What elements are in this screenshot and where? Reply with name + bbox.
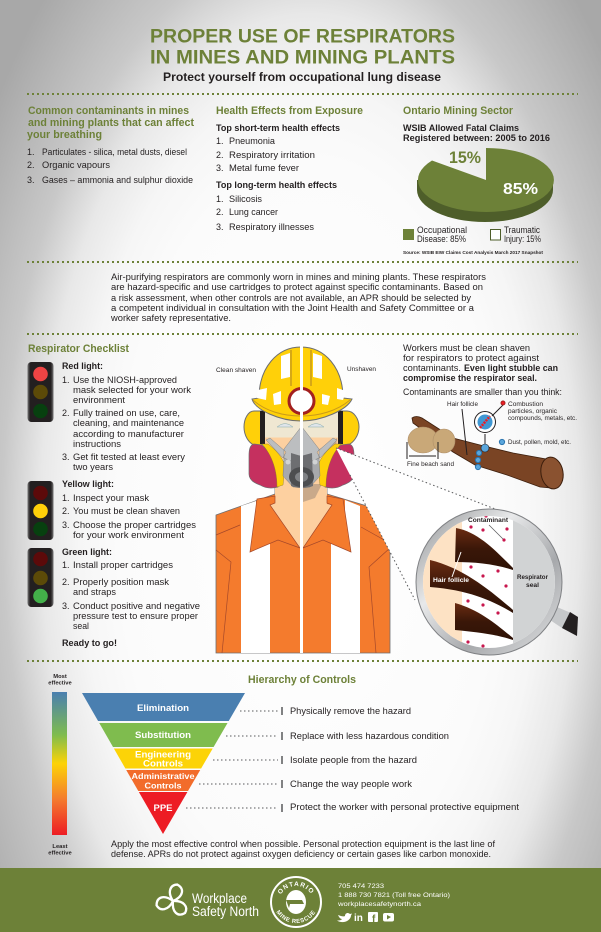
pie legend: Disease: 85% [417, 234, 466, 244]
logo: Workplace Safety North: Safety North [192, 904, 259, 919]
red light steps: Get fit tested at least every [73, 452, 186, 462]
long-term effects list: 2. [216, 207, 224, 217]
particle labels: Hair follicle [447, 401, 479, 408]
panel: health effects [216, 105, 363, 232]
long-term effects list: Silicosis [229, 194, 262, 204]
lens labels: seal [526, 582, 539, 589]
contaminants list: Gases – ammonia and sulphur dioxide [42, 175, 193, 185]
long-term effects list: 1. [216, 194, 224, 204]
yellow light steps: for your work environment [73, 530, 185, 540]
pie chart: 85% [503, 181, 538, 198]
particle magnifier [462, 405, 503, 455]
ear muffs [244, 411, 359, 446]
source note: Source: WSIB EIW Claims Cost Analysis March 2017 Snapshot [403, 250, 543, 256]
panel: common contaminants [27, 105, 194, 185]
lens contents [423, 516, 555, 648]
pie chart: 15% [449, 148, 481, 167]
red light steps: environment [73, 395, 126, 405]
yellow light steps: 2. [62, 506, 70, 516]
red light steps: according to manufacturer [73, 429, 184, 439]
contact details: 1 888 730 7821 (Toll free Ontario) [338, 892, 450, 899]
intro paragraph: Air-purifying respirators are commonly worn in mines and mining plants. These respirators [111, 272, 487, 282]
panel: respirator checklist [28, 343, 200, 648]
worker body and vest [216, 478, 390, 653]
yellow light steps: 1. [62, 493, 70, 503]
illustration: worker with respirator [216, 346, 503, 653]
yellow light steps: Choose the proper cartridges [73, 520, 197, 530]
diagram: particle size on a hair [407, 401, 577, 491]
pie legend: Traumatic [504, 225, 540, 235]
text: clean shaven note: Workers must be clean shaven [403, 343, 530, 353]
control descriptions [290, 706, 520, 812]
long-term effects list: Respiratory illnesses [229, 222, 315, 232]
green light steps: Install proper cartridges [73, 560, 174, 570]
text: clean shaven note: Contaminants are smaller than you think: [403, 387, 562, 397]
contaminants list: 2. [27, 160, 35, 170]
title: PROPER USE OF RESPIRATORS [150, 26, 455, 48]
text: clean shaven note: Even light stubble can [464, 363, 558, 373]
intro paragraph: a risk assessment, when other controls are not available, an APR should be selected by [111, 293, 472, 303]
particle labels [407, 401, 577, 468]
contact details: 705 474 7233 [338, 883, 384, 890]
green light steps: Properly position mask [73, 577, 170, 587]
logo: Ontario Mine Rescue: ONTARIO [278, 882, 314, 894]
intro paragraph: are hazard-specific and use cartridges to protect against specific contaminants. Based on [111, 282, 483, 292]
traffic light: yellow [28, 481, 54, 540]
title: IN MINES AND MINING PLANTS [150, 48, 455, 68]
green light steps [62, 547, 200, 648]
headlamp [289, 388, 314, 414]
inverted pyramid [80, 693, 250, 834]
effectiveness scale: Least [52, 844, 68, 850]
logo: Workplace Safety North: Workplace [192, 891, 247, 906]
short-term effects list: 3. [216, 163, 224, 173]
label: unshaven: Unshaven [347, 366, 376, 373]
effectiveness scale: Most [53, 674, 67, 680]
logo: Ontario Mine Rescue [270, 876, 322, 928]
inverted pyramid: Controls [144, 780, 182, 790]
heading: Ontario: Ontario Mining Sector [403, 105, 514, 117]
long-term effects list: 3. [216, 222, 224, 232]
lens labels: Contaminant [468, 517, 508, 524]
social icons [337, 912, 394, 925]
beach sand grains [408, 427, 455, 453]
short-term effects list: Metal fume fever [229, 163, 299, 173]
inverted pyramid: Engineering [135, 750, 191, 760]
green light steps: seal [73, 621, 89, 631]
intro paragraph [110, 272, 487, 323]
particle labels: Dust, pollen, mold, etc. [508, 439, 571, 446]
social icons: in [354, 913, 363, 924]
lens labels: Hair follicle [433, 577, 470, 584]
effectiveness scale [48, 674, 73, 856]
particle labels: Combustion [508, 401, 544, 408]
control descriptions: Replace with less hazardous condition [290, 731, 449, 741]
label: clean shaven: Clean shaven [216, 367, 256, 374]
head straps and nose piece [266, 427, 337, 461]
text: clean shaven note: compromise the respirator seal. [403, 373, 537, 383]
red light steps [62, 361, 192, 472]
closing note: defense. APRs do not protect against oxygen deficiency or certain gases like carbon monoxide. [111, 849, 491, 859]
red light steps: Fully trained on use, care, [73, 408, 180, 418]
dust particles [475, 450, 482, 470]
control descriptions: Isolate people from the hazard [290, 755, 417, 765]
silver mask sides [283, 456, 320, 487]
logo: Ontario Mine Rescue: MINE RESCUE [276, 910, 316, 924]
particle labels: Fine beach sand [407, 461, 455, 468]
heading: hierarchy: Hierarchy of Controls [248, 674, 356, 686]
yellow light steps: 3. [62, 520, 70, 530]
long-term effects list [216, 180, 337, 232]
short-term effects list: Pneumonia [229, 136, 275, 146]
pie subtitle [403, 123, 550, 143]
contact details: workplacesafetynorth.ca [337, 901, 421, 908]
green light steps: Conduct positive and negative [73, 601, 200, 611]
effectiveness scale: effective [48, 850, 73, 856]
closing note: Apply the most effective control when possible. Personal protection equipment is the last line of [111, 839, 496, 849]
pie subtitle: WSIB Allowed Fatal Claims [403, 123, 519, 133]
footer band [0, 868, 601, 932]
pie subtitle: Registered between: 2005 to 2016 [403, 133, 550, 143]
pyramid leader lines [186, 707, 282, 812]
long-term effects list: Lung cancer [229, 207, 278, 217]
contaminants list: 1. [27, 147, 35, 157]
red light steps: Red light: [62, 361, 103, 371]
yellow light steps: You must be clean shaven [73, 506, 180, 516]
inverted pyramid: Administrative [132, 771, 195, 781]
traffic light: red [28, 362, 54, 422]
magnify cone [336, 448, 503, 640]
yellow light steps: Yellow light: [62, 479, 114, 489]
centre divider [300, 346, 303, 653]
contaminants list [27, 147, 193, 185]
contaminants list: 3. [27, 175, 35, 185]
short-term effects list [216, 123, 340, 173]
panel: hierarchy of controls [48, 674, 520, 859]
pie legend: Occupational [417, 225, 467, 235]
social icons: f [372, 914, 376, 925]
short-term effects list: 2. [216, 150, 224, 160]
intro paragraph: worker safety representative. [110, 313, 231, 323]
lens labels [433, 517, 549, 589]
heading: contaminants: Common contaminants in mines [28, 105, 189, 117]
control descriptions: Change the way people work [290, 779, 413, 789]
particle labels: particles, organic [508, 408, 557, 415]
panel: Ontario mining sector [403, 105, 554, 256]
pie legend: Injury: 15% [504, 234, 541, 244]
long-term effects list: Top long-term health effects [216, 180, 337, 190]
short-term effects list: 1. [216, 136, 224, 146]
red light steps: 2. [62, 408, 70, 418]
yellow light steps [62, 479, 197, 540]
closing note [111, 839, 496, 859]
text: clean shaven note: for respirators to protect against [403, 353, 540, 363]
green light steps: 2. [62, 577, 70, 587]
legend markers [499, 401, 505, 445]
heading: contaminants: your breathing [27, 129, 102, 141]
heading: health effects: Health Effects from Exposure [216, 105, 363, 117]
inverted pyramid: Controls [143, 758, 183, 768]
contact details [337, 883, 450, 908]
short-term effects list: Respiratory irritation [229, 150, 315, 160]
cartridge right [325, 444, 354, 488]
red light steps: 3. [62, 452, 70, 462]
contaminants list: Organic vapours [42, 160, 110, 170]
green light steps: and straps [73, 587, 117, 597]
intro paragraph: a competent individual in consultation with the Joint Health and Safety Committee or a [111, 303, 474, 313]
heading: contaminants: and mining plants that can affect [28, 117, 194, 129]
logo: Workplace Safety North [155, 883, 259, 919]
red light steps: cleaning, and maintenance [73, 418, 184, 428]
pie chart [417, 148, 554, 222]
control descriptions: Physically remove the hazard [290, 706, 411, 716]
green light steps: pressure test to ensure proper [73, 611, 198, 621]
control descriptions: Protect the worker with personal protective equipment [290, 802, 520, 812]
short-term effects list: Top short-term health effects [216, 123, 340, 133]
title [150, 26, 455, 68]
mask body [291, 453, 313, 488]
green light steps: 3. [62, 601, 70, 611]
heading: checklist: Respirator Checklist [28, 343, 129, 355]
cartridge left [249, 444, 278, 488]
hard hat [252, 347, 352, 421]
text: clean shaven note [403, 343, 562, 397]
green light steps: Green light: [62, 547, 112, 557]
red light steps: two years [73, 462, 114, 472]
inverted pyramid: PPE [154, 803, 172, 813]
green light steps: Ready to go! [62, 638, 117, 648]
pie legend [403, 225, 541, 244]
text: clean shaven note: contaminants. [403, 363, 461, 373]
respirator mask [249, 427, 354, 488]
lens labels: Respirator [517, 574, 549, 581]
magnifying glass [416, 509, 578, 655]
red light steps: instructions [73, 439, 122, 449]
heading: contaminants [27, 105, 194, 141]
inverted pyramid: Elimination [137, 703, 189, 713]
face [265, 410, 338, 502]
handle [550, 607, 578, 636]
inverted pyramid: Substitution [135, 730, 191, 740]
red light steps: Use the NIOSH-approved [73, 375, 177, 385]
particle labels: compounds, metals, etc. [508, 415, 577, 422]
contaminants list: Particulates - silica, metal dusts, diesel [42, 147, 187, 157]
yellow cartridge collars [262, 444, 285, 487]
traffic light: green [28, 548, 54, 607]
yellow light steps: Inspect your mask [73, 493, 150, 503]
red light steps: 1. [62, 375, 70, 385]
subtitle: Protect yourself from occupational lung disease [163, 70, 441, 84]
red light steps: mask selected for your work [73, 385, 192, 395]
hair strand [412, 416, 552, 488]
green light steps: 1. [62, 560, 70, 570]
effectiveness scale: effective [48, 680, 73, 686]
